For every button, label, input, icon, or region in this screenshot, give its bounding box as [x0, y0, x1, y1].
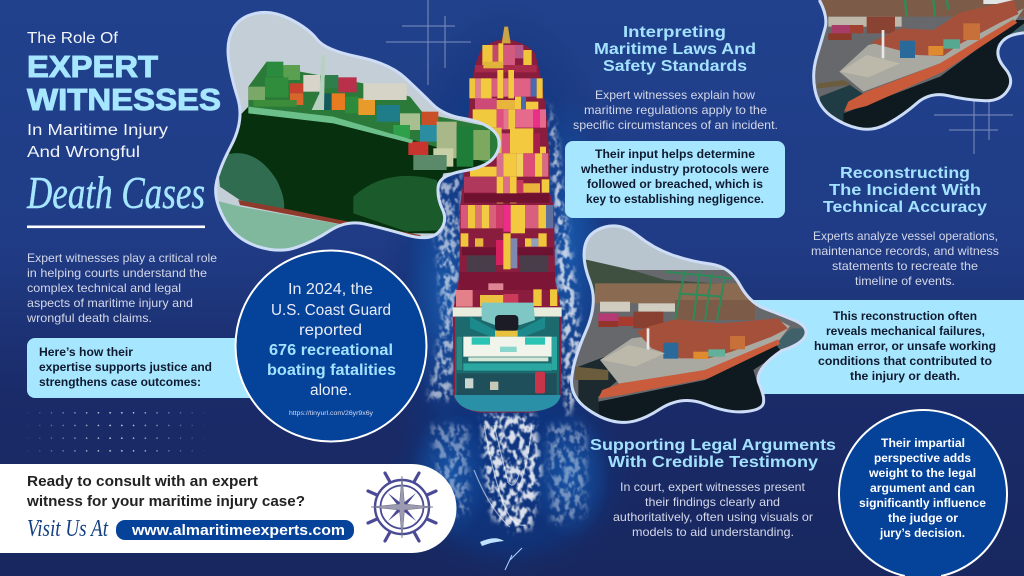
heading: Supporting Legal Arguments: [590, 437, 836, 454]
title block: WITNESSES: [27, 82, 221, 117]
ship superstructure: [453, 303, 562, 412]
impartial perspective circle: Their impartial: [881, 436, 965, 450]
paragraph: maintenance records, and witness: [811, 244, 999, 258]
intro paragraph: [26, 251, 217, 325]
paragraph: [613, 480, 813, 539]
photo blob: listing green cargo ship: [213, 7, 507, 260]
title block: The Role Of: [27, 30, 119, 47]
callout band: [745, 300, 1024, 394]
intro paragraph: Expert witnesses play a critical role: [27, 251, 217, 265]
photo blob: container ship at port: [565, 220, 818, 427]
blob outline: [216, 12, 499, 250]
paragraph: Expert witnesses explain how: [595, 88, 755, 102]
statistic circle: recreational boating fatalities: [236, 250, 426, 442]
heading: [594, 24, 756, 75]
call to action band: Ready to consult with an expert: [27, 474, 258, 490]
callout card: whether industry protocols were: [580, 162, 769, 176]
callout card: Their input helps determine: [595, 147, 755, 161]
paragraph: [811, 229, 999, 288]
website pill: www.almaritimeexperts.com: [131, 522, 345, 539]
light blue callout: how their expertise: expertise supports justice and: [39, 360, 212, 374]
statistic circle: recreational boating fatalities: alone.: [310, 382, 352, 399]
intro paragraph: aspects of maritime injury and: [27, 296, 193, 310]
impartial perspective circle: [839, 410, 1007, 576]
paragraph: their findings clearly and: [645, 495, 780, 509]
statistic circle: recreational boating fatalities: https://tinyurl.com/26yr9x6y: [289, 411, 373, 417]
callout card: followed or breached, which is: [587, 177, 763, 191]
light blue callout: how their expertise: Here’s how their: [39, 345, 133, 359]
heading: Safety Standards: [603, 58, 747, 75]
impartial perspective circle: weight to the legal: [868, 466, 976, 480]
dot pattern: [28, 412, 204, 452]
callout band: reveals mechanical failures,: [826, 324, 985, 338]
callout card: key to establishing negligence.: [586, 192, 764, 206]
impartial perspective circle: argument and can: [870, 481, 975, 495]
heading: Maritime Laws And: [594, 41, 756, 58]
paragraph: specific circumstances of an incident.: [573, 118, 778, 132]
callout band: the injury or death.: [850, 369, 960, 383]
statistic circle: recreational boating fatalities: In 2024, the: [288, 281, 373, 298]
callout band: human error, or unsafe working: [814, 339, 996, 353]
statistic circle: recreational boating fatalities: U.S. Coast Guard: [271, 302, 391, 319]
heading: Interpreting: [623, 24, 726, 41]
call to action band: Visit Us At: [27, 516, 109, 542]
impartial perspective circle: jury’s decision.: [879, 526, 965, 540]
photo blob: container ship top right: [800, 0, 1024, 137]
statistic circle: recreational boating fatalities: boating fatalities: [267, 362, 396, 379]
title block: And Wrongful: [27, 144, 140, 161]
statistic circle: recreational boating fatalities: reported: [299, 322, 362, 339]
paragraph: authoritatively, often using visuals or: [613, 510, 813, 524]
paragraph: models to aid understanding.: [632, 525, 794, 539]
decorative crosshair lines top centre: [386, 0, 471, 85]
impartial perspective circle: significantly influence: [859, 496, 986, 510]
blob outline: [814, 0, 1024, 129]
decorative crosshair lines right: [934, 100, 1013, 154]
container ship illustration: [453, 25, 562, 413]
blob outline: [572, 226, 806, 422]
callout card: [565, 141, 785, 218]
section: supporting legal arguments: [590, 437, 836, 539]
call to action band: [0, 464, 456, 553]
heading: Reconstructing: [840, 165, 970, 182]
ship bow containers: [469, 27, 546, 129]
heading: Technical Accuracy: [823, 199, 987, 216]
call to action band: witness for your maritime injury case?: [26, 494, 305, 510]
title block: Death Cases: [26, 168, 205, 218]
intro paragraph: in helping courts understand the: [27, 266, 207, 280]
paragraph: Experts analyze vessel operations,: [813, 229, 998, 243]
icon: ship wheel compass: [368, 473, 436, 541]
heading: With Credible Testimony: [608, 454, 818, 471]
intro paragraph: complex technical and legal: [27, 281, 181, 295]
intro paragraph: wrongful death claims.: [26, 311, 152, 325]
statistic circle: recreational boating fatalities: 676 recreational: [269, 342, 393, 359]
light blue callout: how their expertise: strengthens case outcomes:: [39, 375, 201, 389]
paragraph: timeline of events.: [855, 274, 955, 288]
ship stern containers: [456, 272, 557, 307]
heading: [590, 437, 836, 471]
title block: In Maritime Injury: [27, 122, 168, 139]
section: interpreting maritime laws: [565, 24, 785, 218]
paragraph: maritime regulations apply to the: [584, 103, 767, 117]
section: reconstructing the incident: [745, 165, 1024, 394]
impartial perspective circle: perspective adds: [874, 451, 971, 465]
title block: [26, 30, 221, 228]
paragraph: statements to recreate the: [832, 259, 978, 273]
heading: The Incident With: [829, 182, 981, 199]
paragraph: [573, 88, 778, 132]
callout band: This reconstruction often: [833, 309, 977, 323]
paragraph: In court, expert witnesses present: [620, 480, 806, 494]
impartial perspective circle: the judge or: [888, 511, 958, 525]
ship mid containers: [461, 128, 553, 272]
callout band: conditions that contributed to: [818, 354, 992, 368]
light blue callout: how their expertise: [27, 338, 267, 398]
heading: [823, 165, 987, 216]
title block: EXPERT: [27, 49, 158, 84]
